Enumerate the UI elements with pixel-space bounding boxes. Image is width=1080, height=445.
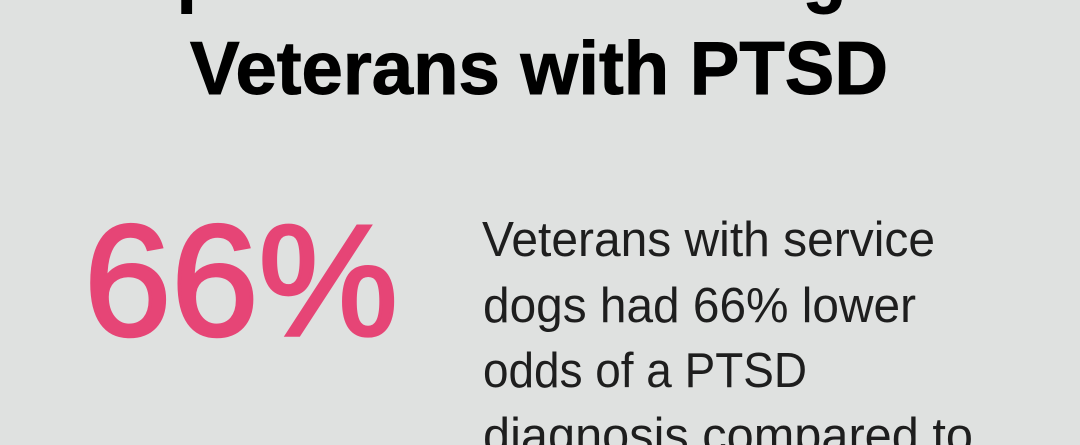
title: Veterans with PTSD xyxy=(190,26,888,110)
big statistic: 66%: 66% xyxy=(84,193,398,369)
statistic description: Veterans with service xyxy=(482,213,935,267)
statistic description xyxy=(482,213,973,445)
statistic description: dogs had 66% lower xyxy=(483,279,916,333)
title xyxy=(93,0,994,110)
statistic description: odds of a PTSD xyxy=(483,344,807,398)
